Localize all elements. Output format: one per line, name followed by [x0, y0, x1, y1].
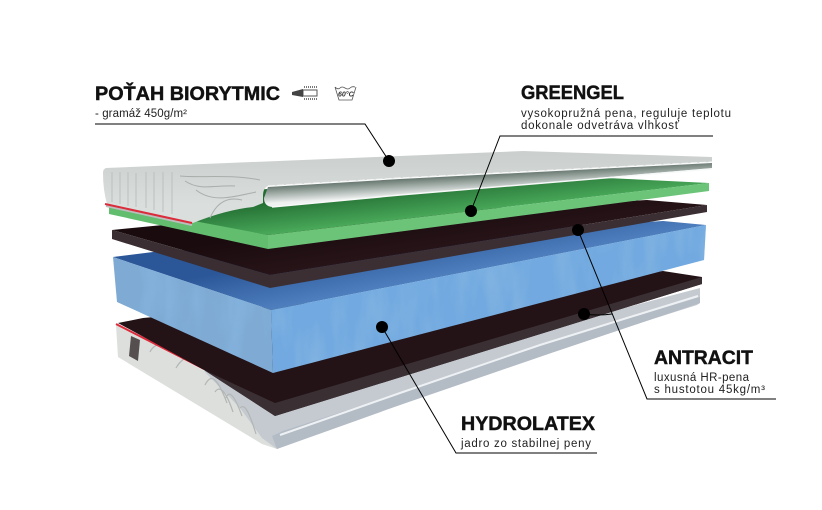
text: antracit description: luxusná HR-pena [654, 372, 750, 384]
heading: hydrolatex: HYDROLATEX [461, 413, 595, 435]
icon: tumble dry [292, 87, 318, 99]
top cover layer: biorytmic [103, 151, 712, 225]
dark layer: antracit [112, 200, 707, 288]
text: hydrolatex description: jadro zo stabilnej peny [460, 438, 591, 450]
red trim bottom [116, 324, 204, 369]
heading: potah biorytmic: POŤAH BIORYTMIC [95, 81, 280, 105]
icon: wash 60: 60°C [338, 90, 355, 98]
text: gramaz: - gramáž 450g/m² [95, 108, 187, 120]
red trim top [105, 204, 192, 225]
heading: greengel: GREENGEL [521, 82, 624, 104]
bottom cover layer [116, 288, 700, 449]
icon: wash 60 [335, 87, 356, 100]
text: antracit description: s hustotou 45kg/m³ [654, 384, 765, 396]
leader: antracit [572, 224, 776, 399]
green layer: greengel [109, 178, 709, 249]
text: greengel description: vysokopružná pena, reguluje teplotu [521, 108, 731, 120]
leader: hydrolatex [376, 321, 597, 453]
blue foam layer: hydrolatex [113, 221, 706, 373]
text: greengel description: dokonale odvetráva vlhkosť [521, 120, 680, 132]
mattress illustration [103, 151, 712, 449]
label tag [129, 336, 140, 361]
text: greengel description [521, 108, 731, 132]
bottom dark layer [118, 271, 702, 416]
heading: antracit: ANTRACIT [654, 347, 753, 369]
leader: greengel [465, 136, 713, 217]
text: antracit description [654, 372, 765, 396]
leader: potah [95, 124, 395, 167]
